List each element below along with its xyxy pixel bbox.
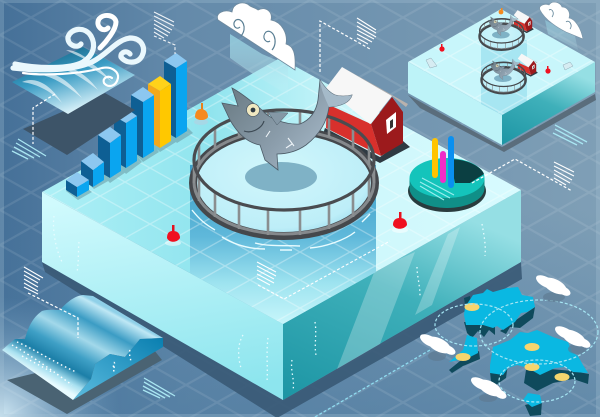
- mini buoys: [439, 44, 551, 74]
- wave cross-section: [73, 338, 163, 400]
- house: [323, 67, 410, 163]
- mini fish 2: [490, 59, 520, 80]
- panel: small farm block: [408, 8, 596, 152]
- icon: wind panel: [12, 15, 144, 114]
- pen top rail: [194, 110, 374, 210]
- dotted bubbles: [53, 216, 485, 390]
- icon: wave: [2, 295, 163, 400]
- leader line: wave: [28, 293, 78, 338]
- mini orange buoy: [499, 8, 503, 14]
- house platform: [323, 128, 410, 163]
- block right face: [283, 190, 521, 400]
- chart stripes: [420, 178, 454, 200]
- wind shadow: [23, 93, 135, 155]
- label stripes: small block: [553, 125, 587, 145]
- leader line: cloud/house: [320, 21, 370, 72]
- wind swirls: [13, 15, 144, 86]
- label stripes: wind: [12, 139, 46, 159]
- fish: [222, 80, 352, 170]
- house gable wall: [371, 97, 403, 156]
- map network rings: [435, 300, 598, 402]
- pen base ring: [193, 130, 375, 236]
- map clouds: [418, 272, 592, 402]
- house window: [386, 112, 396, 134]
- buoy orange: [194, 103, 208, 125]
- roof: [326, 67, 392, 124]
- block top face: [42, 58, 521, 324]
- bar 5: [131, 87, 154, 158]
- wave foam: [12, 342, 131, 385]
- block left face: [42, 192, 283, 400]
- label stripes: wave: [24, 267, 43, 294]
- bar 2: [81, 153, 104, 187]
- pen posts: [194, 111, 374, 235]
- bar 4: [114, 108, 137, 168]
- label stripes: cloud: [357, 18, 376, 44]
- label stripes: wave bottom: [143, 378, 175, 398]
- wave shadow: [7, 345, 162, 414]
- buoy red left: [165, 225, 181, 246]
- wave top surface: [2, 295, 163, 400]
- pie disc: [408, 136, 486, 212]
- map continents: [464, 287, 535, 330]
- mini house 2: [517, 54, 538, 77]
- map dots: [456, 303, 570, 381]
- icon: top cloud: [217, 3, 295, 95]
- mini rocks: [426, 58, 573, 70]
- map shadows: [449, 296, 589, 416]
- panel: main aquaculture block: [42, 58, 521, 400]
- mini pen 2: [481, 62, 526, 94]
- yellow bar: [432, 138, 438, 178]
- mini pen 1: [479, 18, 524, 50]
- buoy red right: [392, 212, 408, 233]
- label stripes: pie disc: [554, 162, 574, 185]
- fish farm pen: [193, 110, 375, 236]
- bar 3: [98, 127, 121, 178]
- house front wall: [326, 104, 381, 156]
- fish eye: [246, 104, 260, 116]
- pen ripples: [192, 210, 370, 250]
- label stripes: bar chart: [154, 12, 175, 54]
- panel: main block shadow: [42, 262, 522, 417]
- leader line: centre label: [258, 241, 390, 299]
- leader line: map: [315, 350, 430, 417]
- small top-right cloud: [540, 2, 583, 50]
- bar 7: [164, 53, 187, 138]
- bar 1: [66, 172, 89, 197]
- leader line: pie disc: [472, 159, 572, 191]
- pool water: [194, 130, 374, 236]
- leader line: wind: [33, 94, 55, 144]
- label stripes: centre: [257, 262, 276, 285]
- bar chart: [66, 53, 193, 200]
- world map: [435, 287, 598, 416]
- fish shadow: [245, 162, 317, 192]
- mini fish 1: [488, 15, 518, 36]
- bar 6 yellow: [148, 76, 171, 148]
- pink bar: [440, 151, 446, 183]
- pen water column: [190, 165, 376, 324]
- blue bar: [448, 136, 454, 188]
- mini house 1: [513, 10, 534, 33]
